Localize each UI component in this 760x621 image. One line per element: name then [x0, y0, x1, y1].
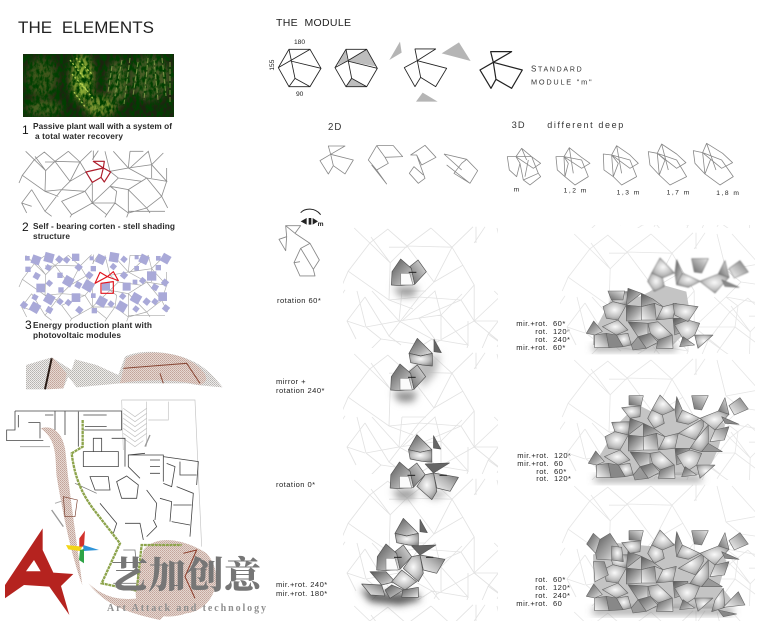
- hexagon with dimensions: 90: [296, 91, 304, 98]
- standard module m: STANDARD: [531, 64, 582, 73]
- building walls: [7, 411, 198, 583]
- point cloud elevation: [26, 352, 223, 389]
- site plan with green route: [7, 400, 216, 620]
- rotation labels, right column: 120*: [553, 583, 570, 592]
- rotation labels, right column: 60*: [554, 467, 567, 476]
- module cluster: mirror + rotation 240: [391, 338, 441, 402]
- depth labels: 1,8 m: [716, 190, 739, 197]
- caption 3: 3: [25, 318, 32, 332]
- caption 3: photovoltaic modules: [33, 330, 121, 340]
- panel: left column background nets: [343, 222, 498, 621]
- rotation labels, right column: rot.: [535, 335, 548, 344]
- logo tagline: Art Attack and technology: [107, 603, 266, 614]
- panel: 3D variants: [507, 120, 739, 197]
- module cluster: rotation 60: [391, 259, 426, 297]
- rotation labels, right column: 240*: [553, 591, 570, 600]
- standard module m: MODULE "m": [531, 78, 592, 87]
- brown point cloud strips: [41, 427, 82, 585]
- caption 1: a total water recovery: [35, 131, 123, 141]
- rotation labels, right column: 60: [553, 599, 562, 608]
- panel: right column background nets: [560, 225, 755, 621]
- 2D shapes: [320, 145, 478, 184]
- depth labels: 1,2 m: [564, 188, 587, 195]
- depth labels: m: [514, 187, 520, 194]
- rotation labels, left column: rotation 60*: [277, 296, 321, 305]
- hexagon with dimensions: 155: [269, 59, 276, 71]
- label 2D: 2D: [328, 122, 342, 133]
- label 3D: 3D: [512, 120, 526, 130]
- rotation labels, right column: mir.+rot.: [517, 451, 549, 460]
- hexagon with dimensions: [269, 39, 321, 98]
- rotation labels, right column: mir.+rot.: [517, 459, 549, 468]
- photo: passive plant wall: [23, 54, 174, 117]
- rotation labels, right column: mir.+rot.: [516, 343, 548, 352]
- rotation labels, right column: 120*: [554, 451, 571, 460]
- caption 2: structure: [33, 231, 70, 241]
- rotation labels, right column: 120*: [554, 474, 571, 483]
- caption 2: 2: [22, 220, 29, 234]
- rotation labels, right column: rot.: [535, 575, 548, 584]
- icon: pinwheel: [66, 531, 99, 563]
- rotation labels, right column: 120*: [553, 327, 570, 336]
- panel: the elements: [7, 54, 223, 620]
- rotation labels, right column: [516, 319, 571, 608]
- panel: 2D variants: [320, 122, 478, 184]
- caption 1: Passive plant wall with a system of: [33, 121, 172, 131]
- module cluster: mir.+rot. 120, mir.+rot. 60, rot. 60, rot. 120: [588, 395, 748, 481]
- panel: module construction: [269, 39, 592, 102]
- rotation labels, left column: mirror +: [276, 377, 306, 386]
- standard module m: [480, 52, 592, 88]
- rotation labels, right column: mir.+rot.: [516, 599, 548, 608]
- red standard module: [86, 161, 111, 182]
- rotation icon: [301, 209, 324, 228]
- rotation labels, right column: rot.: [536, 467, 549, 476]
- rotation labels, left column: rotation 240*: [276, 386, 325, 395]
- caption 2: Self - bearing corten - stell shading: [33, 221, 175, 231]
- depth labels: [514, 187, 739, 197]
- hexagon with shaded triangles: [335, 49, 377, 87]
- logo text: 艺加创意: [111, 554, 264, 597]
- module with removed triangles: [389, 42, 471, 102]
- green route: [72, 420, 182, 591]
- depth labels: 1,7 m: [667, 190, 690, 197]
- module cluster: mir.+rot. 60, rot. 120, rot. 240, mir.+rot. 60: [586, 258, 748, 350]
- rotation labels, right column: 240*: [553, 335, 570, 344]
- rotation labels, left column: [276, 296, 328, 598]
- rotation labels, right column: 60*: [553, 575, 566, 584]
- rotation labels, right column: rot.: [535, 583, 548, 592]
- rotation labels, right column: 60*: [553, 343, 566, 352]
- rotated module outline: [279, 226, 319, 276]
- rotation labels, right column: 60: [554, 459, 563, 468]
- rotation labels, left column: mir.+rot. 240*: [276, 580, 328, 589]
- caption 3: Energy production plant with: [33, 320, 152, 330]
- module cluster: rotation 0: [390, 435, 458, 500]
- rotation labels, right column: rot.: [535, 327, 548, 336]
- caption 3: [25, 318, 152, 340]
- rotation labels, left column: rotation 0*: [276, 480, 316, 489]
- hexagon with dimensions: 180: [294, 39, 305, 46]
- caption 1: [22, 121, 172, 141]
- caption 2: [22, 220, 175, 241]
- diagram: photovoltaic modules net: [19, 252, 172, 321]
- rotation labels, left column: mir.+rot. 180*: [276, 589, 328, 598]
- rotation labels, right column: mir.+rot.: [516, 319, 548, 328]
- module cluster: mir.+rot. 240, mir.+rot. 180: [360, 518, 445, 605]
- hatched court: [122, 400, 202, 547]
- red module on photovoltaic net: [95, 272, 118, 293]
- rotation labels, right column: 60*: [553, 319, 566, 328]
- logo watermark: [5, 528, 266, 615]
- diagram: corten shading structure net: [19, 151, 168, 217]
- rotation labels, right column: rot.: [536, 474, 549, 483]
- caption 1: 1: [22, 123, 29, 137]
- heading: the elements: THE ELEMENTS: [18, 18, 154, 37]
- depth labels: 1,3 m: [617, 190, 640, 197]
- rotation labels, right column: rot.: [535, 591, 548, 600]
- module cluster: rot. 60, rot. 120, rot. 240, mir.+rot. 60: [586, 530, 748, 617]
- heading: the module: THE MODULE: [276, 17, 351, 29]
- 3D shapes: [507, 143, 733, 185]
- logo: red A: [5, 528, 73, 615]
- rotation icon: m: [318, 221, 324, 228]
- label different deep: different deep: [547, 120, 623, 130]
